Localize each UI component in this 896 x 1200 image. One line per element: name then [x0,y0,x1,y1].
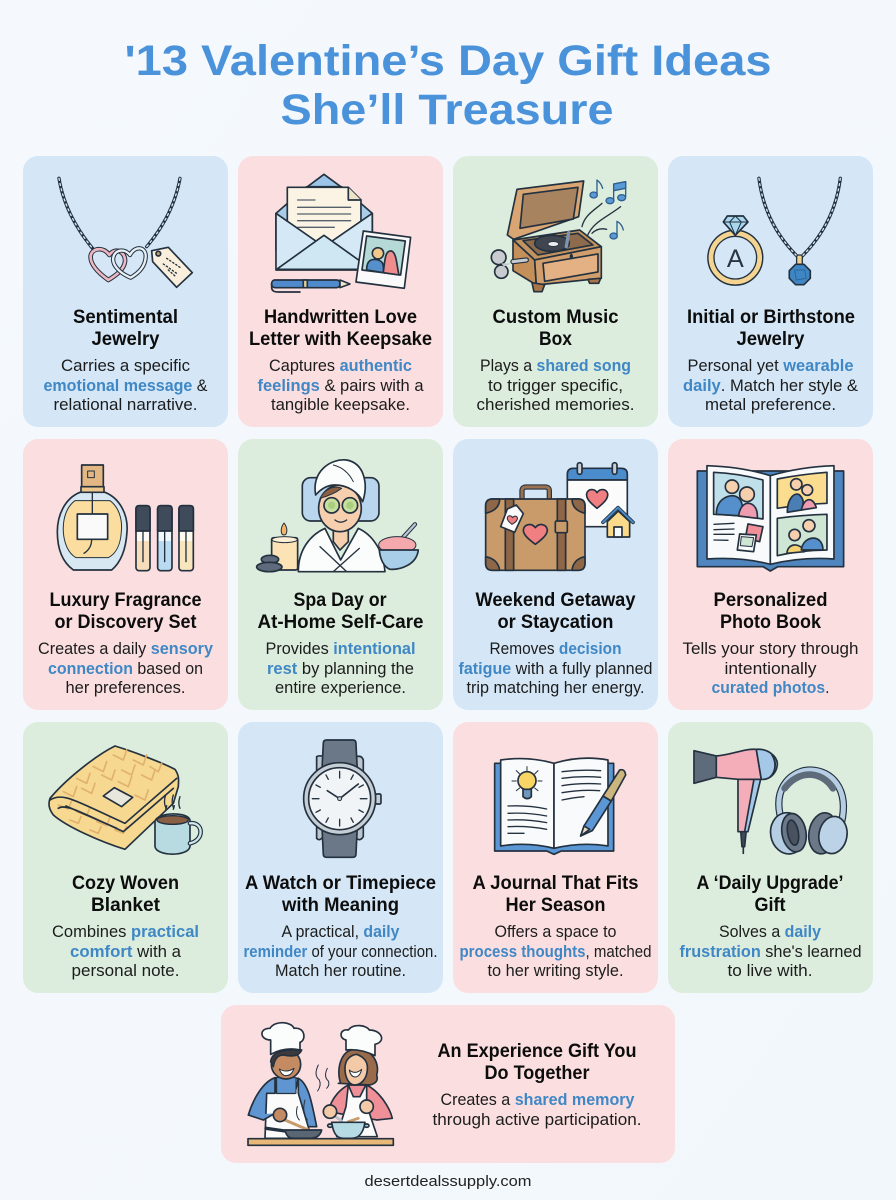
heading: Box [539,328,572,350]
text block: to live with. [728,962,812,980]
heading: Her Season [506,894,606,916]
text block: daily. Match her style & [683,377,858,395]
panel: journal [453,722,658,993]
heading [472,872,639,916]
heading: A Journal That Fits [472,872,639,894]
heading: Personalized [714,589,828,611]
heading: Custom Music [492,306,619,328]
heading [72,872,179,916]
icon: envelope, polaroid and pen [272,174,411,292]
text block: Match her routine. [275,962,406,980]
heading: At-Home Self-Care [258,611,424,633]
panel: daily upgrade [668,722,873,993]
title: '13 Valentine’s Day Gift Ideas [124,37,772,85]
panel: weekend getaway [453,439,658,710]
heading [492,306,619,350]
heading [714,589,828,633]
text block: connection based on [48,660,203,678]
heading [438,1040,636,1084]
text block: rest by planning the [267,660,414,678]
text block: Personal yet wearable [688,357,854,375]
icon: open photo album [697,466,844,571]
heading: or Staycation [498,611,614,633]
heading: Gift [754,894,786,916]
text block: Solves a daily [719,923,822,941]
panel: fragrance [23,439,228,710]
text block: to trigger specific, [488,377,623,395]
panel: initial or birthstone jewelry [668,156,873,427]
text block: emotional message & [44,377,208,395]
title [124,37,772,134]
heading: Blanket [91,894,160,916]
panel: watch [238,722,443,993]
heading: Luxury Fragrance [50,589,202,611]
text block: intentionally [724,660,817,678]
heading: Jewelry [92,328,160,350]
text block: to her writing style. [488,962,624,980]
icon: perfume bottle and vials [57,465,193,571]
heading [476,589,636,633]
text block: Carries a specific [61,357,190,375]
icon: ring and pendant necklace [708,178,840,285]
text block: personal note. [72,962,180,980]
heading: Sentimental [73,306,178,328]
icon: music box [491,180,626,292]
icon: hair dryer and headphones [694,749,850,857]
text block: Removes decision [490,640,622,658]
text block [258,357,424,414]
panel: music box [453,156,658,427]
text block [266,640,416,697]
text block: Offers a space to [494,923,616,941]
icon: necklace with hearts and tag [59,178,192,287]
panel: experience gift [221,1005,675,1163]
panel: photo book [668,439,873,710]
heading: Initial or Birthstone [687,306,855,328]
heading: Spa Day or [294,589,387,611]
heading: Jewelry [736,328,805,350]
text block [683,357,858,414]
panel: spa day [238,439,443,710]
heading: with Meaning [281,894,399,916]
footer url: desertdealssupply.com [364,1173,532,1190]
title: She’ll Treasure [280,86,614,134]
text block: tangible keepsake. [271,396,410,414]
heading: Cozy Woven [72,872,179,894]
text block: Provides intentional [266,640,416,658]
icon: spa face mask, candle and bowl [257,460,418,572]
heading [696,872,844,916]
heading: Weekend Getaway [476,589,636,611]
text block: reminder of your connection. [244,943,438,961]
icon: folded blanket and mug [49,746,201,854]
text block [682,640,858,697]
heading: A Watch or Timepiece [245,872,436,894]
heading: Do Together [484,1062,590,1084]
text block: fatigue with a fully planned [458,660,652,678]
icon: two chefs cooking together [248,1023,393,1145]
text block: process thoughts, matched [460,943,652,961]
text block: A practical, daily [282,923,400,941]
text block: frustration she's learned [680,943,862,961]
icon: open journal with bulb and pen [495,758,626,854]
heading [687,306,855,350]
icon: wrist watch [304,740,381,857]
text block: Plays a shared song [480,357,631,375]
heading: Handwritten Love [264,306,417,328]
text block: through active participation. [432,1111,642,1129]
text block: Combines practical [52,923,199,941]
text block: comfort with a [70,943,182,961]
heading [73,306,178,350]
text block: feelings & pairs with a [258,377,424,395]
text block [44,357,208,414]
text block [432,1091,642,1129]
text block: cherished memories. [476,396,634,414]
heading [50,589,202,633]
text block: Creates a shared memory [440,1091,635,1109]
text block [460,923,652,980]
text block: metal preference. [705,396,836,414]
heading [249,306,432,350]
text block [458,640,652,697]
heading: Letter with Keepsake [249,328,432,350]
text block: curated photos. [712,679,830,697]
panel: cozy blanket [23,722,228,993]
panel: love letter [238,156,443,427]
heading [258,589,424,633]
text block: relational narrative. [54,396,198,414]
text block [244,923,438,980]
heading: An Experience Gift You [438,1040,636,1062]
heading: A ‘Daily Upgrade’ [696,872,844,894]
panel: sentimental jewelry [23,156,228,427]
heading: or Discovery Set [54,611,197,633]
heading [245,872,436,916]
text block: Creates a daily sensory [38,640,214,658]
text block: Captures authentic [269,357,412,375]
text block [38,640,214,697]
icon: suitcase, calendar and house [486,463,633,570]
text block: Tells your story through [682,640,858,658]
heading: Photo Book [720,611,821,633]
text block: trip matching her energy. [466,679,644,697]
text block [52,923,199,980]
text block: her preferences. [66,679,186,697]
text block [680,923,862,980]
text block: entire experience. [275,679,406,697]
icon: ring and pendant necklace: A [727,245,744,273]
text block [476,357,634,414]
